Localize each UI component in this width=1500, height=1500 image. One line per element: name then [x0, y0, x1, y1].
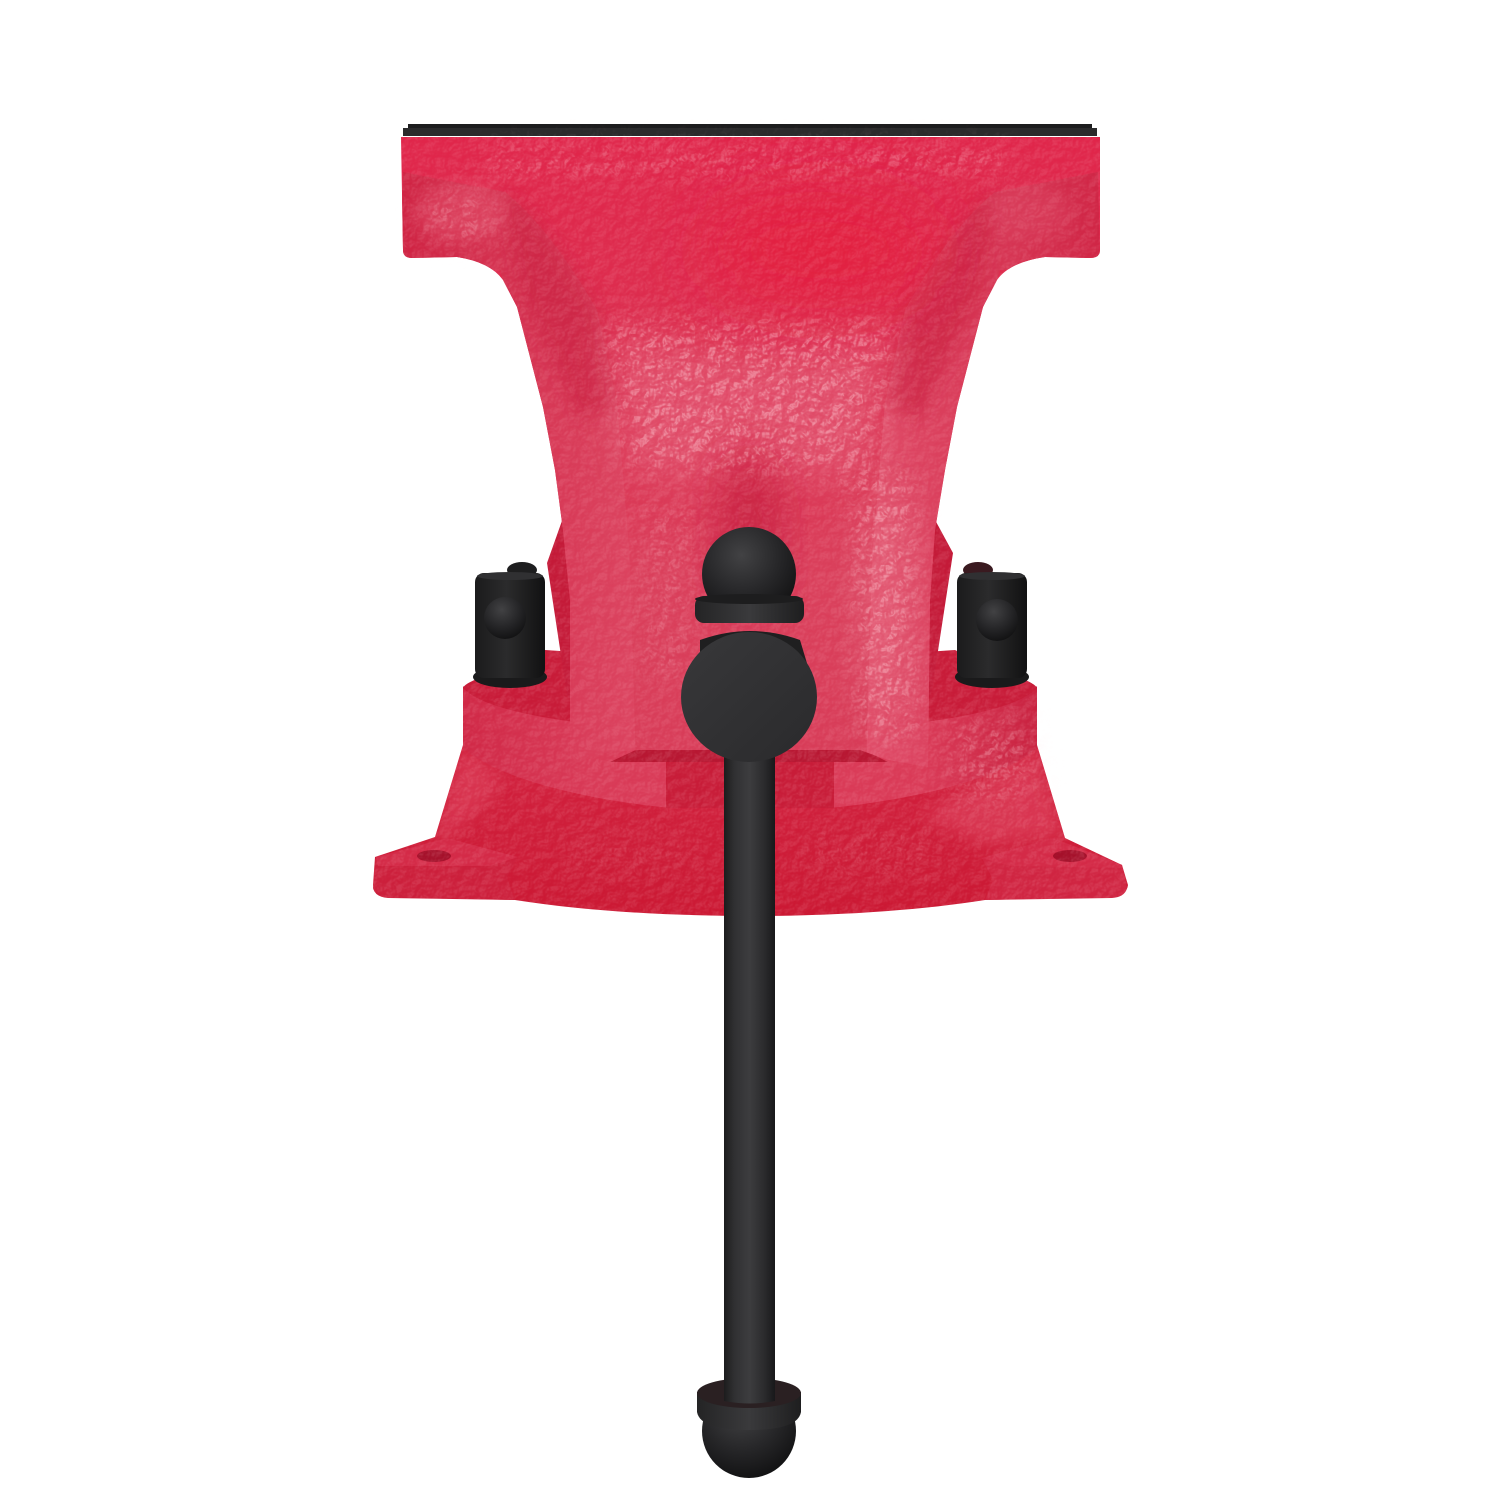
lit right shoulder [1002, 194, 1067, 229]
lit centre plate [605, 330, 895, 480]
lit left shoulder [416, 182, 508, 242]
swivel base lower flange [373, 745, 1128, 916]
handle rod [724, 745, 775, 1390]
right flare lit edge [920, 750, 1065, 845]
screw head top ball [702, 527, 796, 621]
left flare lit edge [436, 756, 497, 836]
handle pivot head [681, 631, 817, 762]
shaded shoulder left [511, 206, 614, 419]
left rear web [547, 518, 572, 700]
lower handle ball [702, 1384, 796, 1478]
lower handle collar [697, 1378, 801, 1430]
left guide pin [473, 562, 547, 688]
screw collar [695, 594, 804, 623]
center recess under body [610, 748, 888, 808]
illustration: red bench vise [373, 124, 1128, 1478]
red cast iron vise [373, 130, 1128, 916]
swivel ring band [463, 686, 1037, 808]
main body [400, 130, 1100, 770]
right flank [866, 172, 1100, 770]
textured metallic glints [425, 150, 1040, 880]
dark screw channel [710, 444, 790, 550]
right mounting foot [982, 838, 1127, 900]
lower front lit patch right [860, 485, 910, 715]
saturated red top centre [717, 194, 922, 313]
right ring top surface [925, 650, 1037, 722]
left mounting foot [373, 838, 518, 900]
right guide pin [955, 562, 1029, 688]
left ring top surface [463, 650, 575, 722]
right rear web [928, 518, 953, 700]
shaded shoulder right [886, 206, 990, 420]
left flank [400, 172, 636, 770]
black rubber jaw strip [403, 124, 1097, 136]
flare lit edges [435, 750, 1065, 845]
